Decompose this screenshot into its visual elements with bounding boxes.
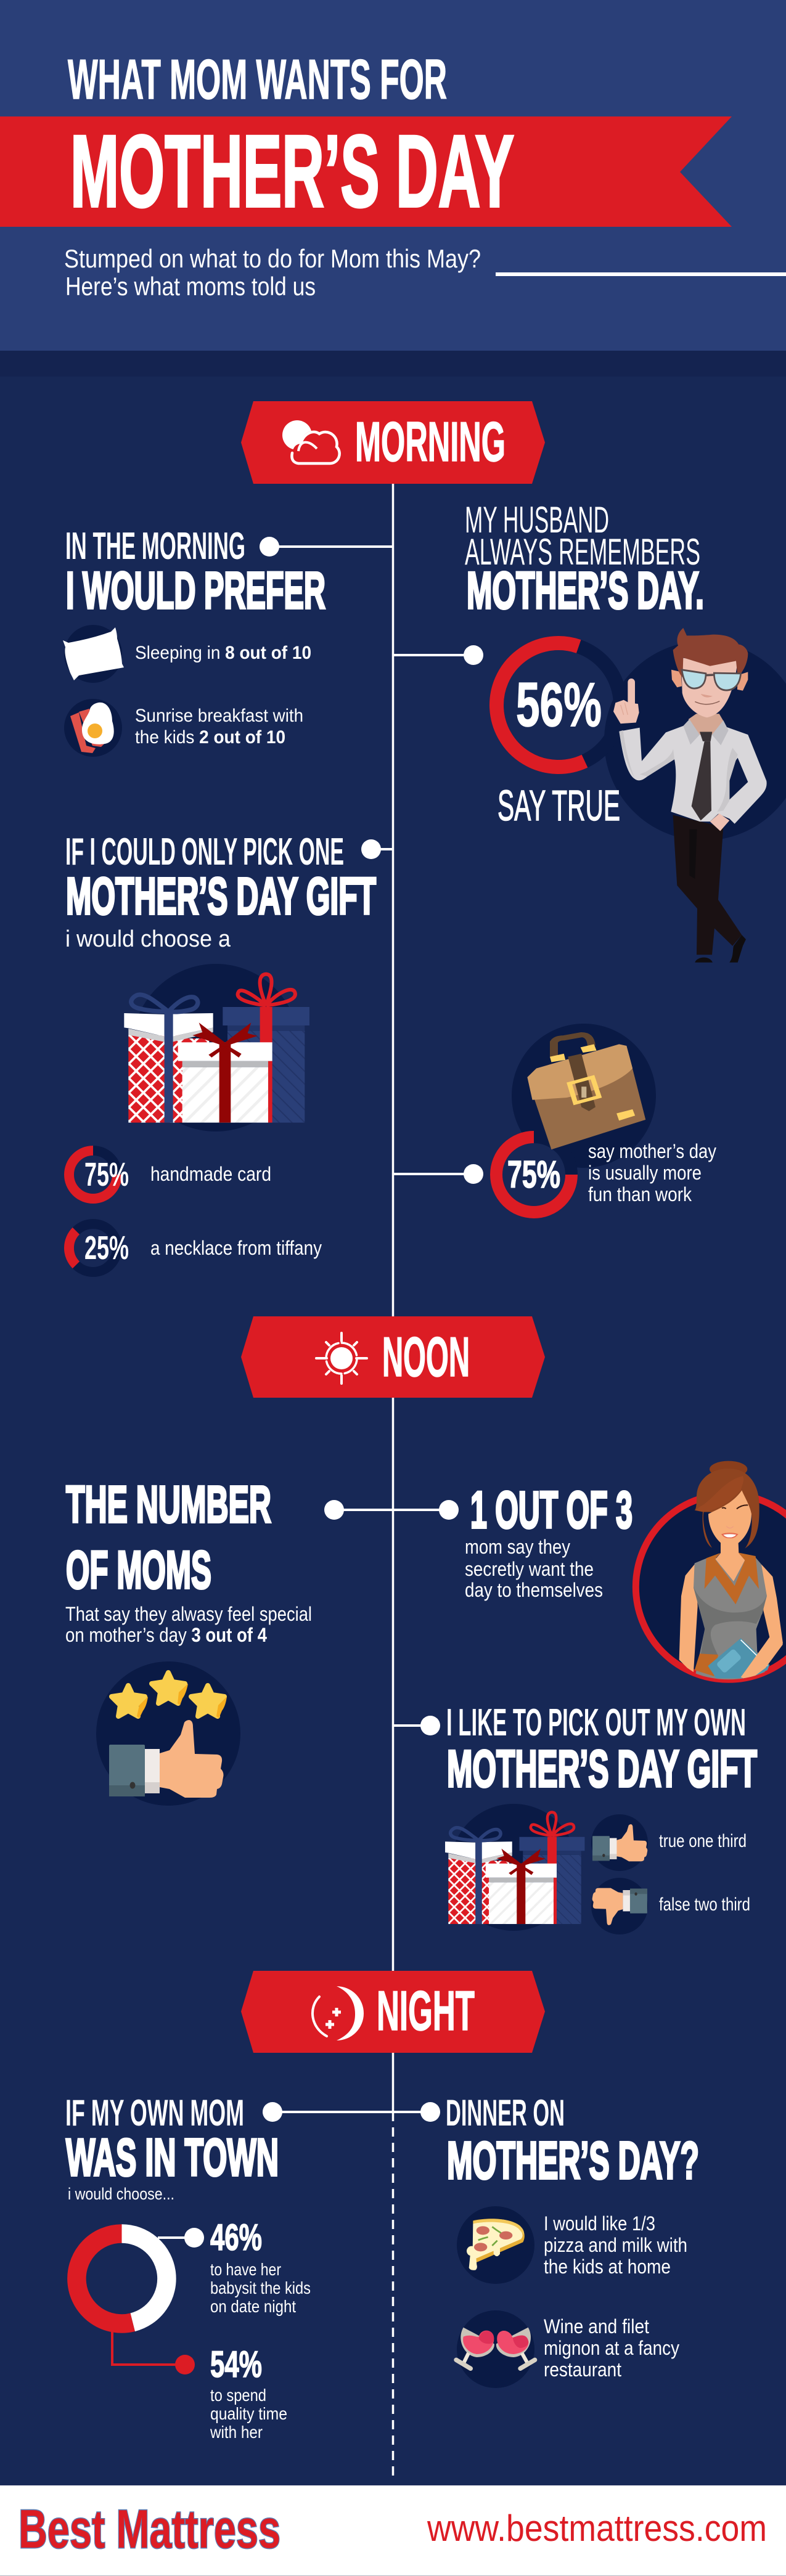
banner: noon xyxy=(241,1316,545,1398)
section: if my own mom xyxy=(65,2092,440,2442)
text: pizza: pizza and milk with xyxy=(544,2234,687,2256)
heading: MY HUSBAND xyxy=(465,499,609,540)
text: wine xyxy=(544,2315,679,2381)
stat: 46 percent: babysit the kids xyxy=(210,2278,311,2297)
donut chart: 56% xyxy=(496,643,620,767)
text: say true: SAY TRUE xyxy=(497,781,620,829)
banner: night: NIGHT xyxy=(377,1980,475,2042)
footer xyxy=(0,2484,786,2576)
text: handmade card: handmade card xyxy=(150,1163,271,1185)
stat: 46 percent: on date night xyxy=(210,2297,296,2316)
text: want the day: mom say they xyxy=(465,1536,570,1558)
heading xyxy=(446,1702,757,1798)
heading xyxy=(65,2092,279,2187)
text: pizza: I would like 1/3 xyxy=(544,2212,655,2235)
connector: 46 percent xyxy=(158,2228,204,2248)
text: 75 percent: 75% xyxy=(507,1154,560,1196)
intro text: Stumped on what to do for Mom this May? xyxy=(64,244,481,273)
connector xyxy=(393,1164,483,1184)
stat: 54 percent: 54% xyxy=(210,2344,262,2385)
intro rule xyxy=(496,272,786,276)
section: husband remembers xyxy=(393,499,786,963)
heading xyxy=(65,525,325,619)
stat: 54 percent: quality time xyxy=(210,2404,287,2423)
connector xyxy=(263,2102,440,2122)
section: pick one gift xyxy=(65,831,393,1272)
icon: pillow xyxy=(63,625,124,683)
man backdrop xyxy=(604,641,786,841)
icon: pizza xyxy=(457,2206,534,2284)
donut chart: 46 / 54 xyxy=(76,2233,166,2323)
donut chart: 75% handmade card xyxy=(69,1151,129,1199)
text: want the day: day to themselves xyxy=(465,1579,603,1601)
text: always feel special xyxy=(65,1603,312,1646)
section: number of moms xyxy=(65,1475,459,1806)
briefcase backdrop xyxy=(512,1024,656,1168)
text: say mother's day: fun than work xyxy=(588,1183,692,1205)
icon: stars and thumbs up xyxy=(96,1661,240,1806)
donut chart: 56%: 56% xyxy=(516,670,602,740)
icon: small gift boxes xyxy=(445,1804,584,1931)
donut chart: 25% necklace xyxy=(69,1224,129,1272)
intro text xyxy=(64,244,481,301)
stat: 46 percent: to have her xyxy=(210,2260,281,2279)
section: dinner on mother's day xyxy=(446,2092,699,2388)
heading xyxy=(465,499,704,619)
text: sunrise breakfast: the kids 2 out of 10 xyxy=(135,727,285,748)
text: want the day xyxy=(465,1536,603,1601)
section: more fun than work xyxy=(393,1024,716,1212)
connector xyxy=(361,839,393,859)
icon: gift boxes xyxy=(124,964,309,1131)
stat: 54 percent: with her xyxy=(210,2423,263,2442)
title line: what mom wants for: WHAT MOM WANTS FOR xyxy=(68,49,447,111)
heading: MOTHER’S DAY GIFT xyxy=(66,867,376,925)
connector xyxy=(393,645,483,665)
icon: thumbs up xyxy=(591,1814,648,1871)
donut chart: 75% handmade card: 75% xyxy=(84,1156,129,1193)
text: pizza xyxy=(544,2212,687,2278)
timeline xyxy=(392,484,394,2479)
text: wine: Wine and filet xyxy=(544,2315,649,2338)
section: in the morning xyxy=(63,525,393,757)
text: pizza: the kids at home xyxy=(544,2256,671,2278)
text: necklace: a necklace from tiffany xyxy=(150,1237,322,1259)
text: always feel special: That say they alwasy feel special xyxy=(65,1603,312,1625)
text: always feel special: on mother’s day 3 out of 4 xyxy=(65,1624,267,1646)
heading: WAS IN TOWN xyxy=(66,2129,279,2187)
heading: IF I COULD ONLY PICK ONE xyxy=(65,831,344,873)
icon: wine glasses xyxy=(456,2310,535,2388)
icon: egg and bacon xyxy=(64,699,122,757)
text: wine: mignon at a fancy xyxy=(544,2337,679,2359)
heading: OF MOMS xyxy=(66,1541,211,1600)
header panel xyxy=(0,0,786,377)
connector xyxy=(324,1500,459,1520)
illustration: man pointing xyxy=(613,628,767,963)
text: say mother's day: say mother’s day xyxy=(588,1140,716,1162)
section: 1 out of 3 xyxy=(465,1461,786,1684)
heading xyxy=(446,2092,699,2190)
connector xyxy=(393,1716,440,1735)
text: sunrise breakfast xyxy=(135,706,303,748)
text: true one third: true one third xyxy=(659,1831,747,1851)
heading: THE NUMBER xyxy=(66,1475,271,1533)
text: say mother's day: is usually more xyxy=(588,1162,702,1184)
stat: 46 percent xyxy=(210,2217,311,2316)
illustration: woman in circle xyxy=(636,1461,786,1684)
stat: 54 percent: to spend xyxy=(210,2386,266,2405)
icon: briefcase xyxy=(527,1035,645,1149)
donut chart: 75% fun xyxy=(496,1137,571,1212)
stat: 46 percent: 46% xyxy=(210,2217,262,2258)
icon: sun and cloud xyxy=(282,420,340,463)
text: wine: restaurant xyxy=(544,2358,621,2381)
text: sleeping in: Sleeping in 8 out of 10 xyxy=(135,643,311,663)
donut chart: 25% necklace: 25% xyxy=(84,1229,129,1266)
text: false two third: false two third xyxy=(659,1894,750,1915)
heading xyxy=(65,831,376,925)
connector: 54 percent xyxy=(112,2329,195,2374)
text: want the day: secretly want the xyxy=(465,1558,594,1580)
intro text: Here’s what moms told us xyxy=(65,272,316,301)
text: i would choose a: i would choose a xyxy=(65,926,231,952)
heading: I WOULD PREFER xyxy=(66,561,325,619)
logo: best mattress: Best Mattress xyxy=(18,2498,280,2559)
connector xyxy=(260,537,393,556)
banner: morning xyxy=(241,401,545,484)
heading: 1 OUT OF 3 xyxy=(470,1481,632,1539)
heading: IN THE MORNING xyxy=(65,525,245,568)
heading: IF MY OWN MOM xyxy=(65,2092,244,2134)
stat: 54 percent xyxy=(210,2344,287,2442)
section: pick out my own gift xyxy=(393,1702,757,1934)
text: say mother's day xyxy=(588,1140,716,1205)
text: i would choose: i would choose... xyxy=(68,2185,174,2203)
heading xyxy=(66,1475,271,1600)
banner: morning: MORNING xyxy=(355,411,506,473)
heading: DINNER ON xyxy=(446,2092,565,2134)
icon: moon xyxy=(313,1986,364,2040)
banner: noon: NOON xyxy=(382,1326,470,1388)
banner: night xyxy=(241,1971,545,2053)
icon: thumbs down xyxy=(591,1878,648,1934)
text: sunrise breakfast: Sunrise breakfast with xyxy=(135,706,303,726)
icon: sun xyxy=(316,1333,367,1384)
